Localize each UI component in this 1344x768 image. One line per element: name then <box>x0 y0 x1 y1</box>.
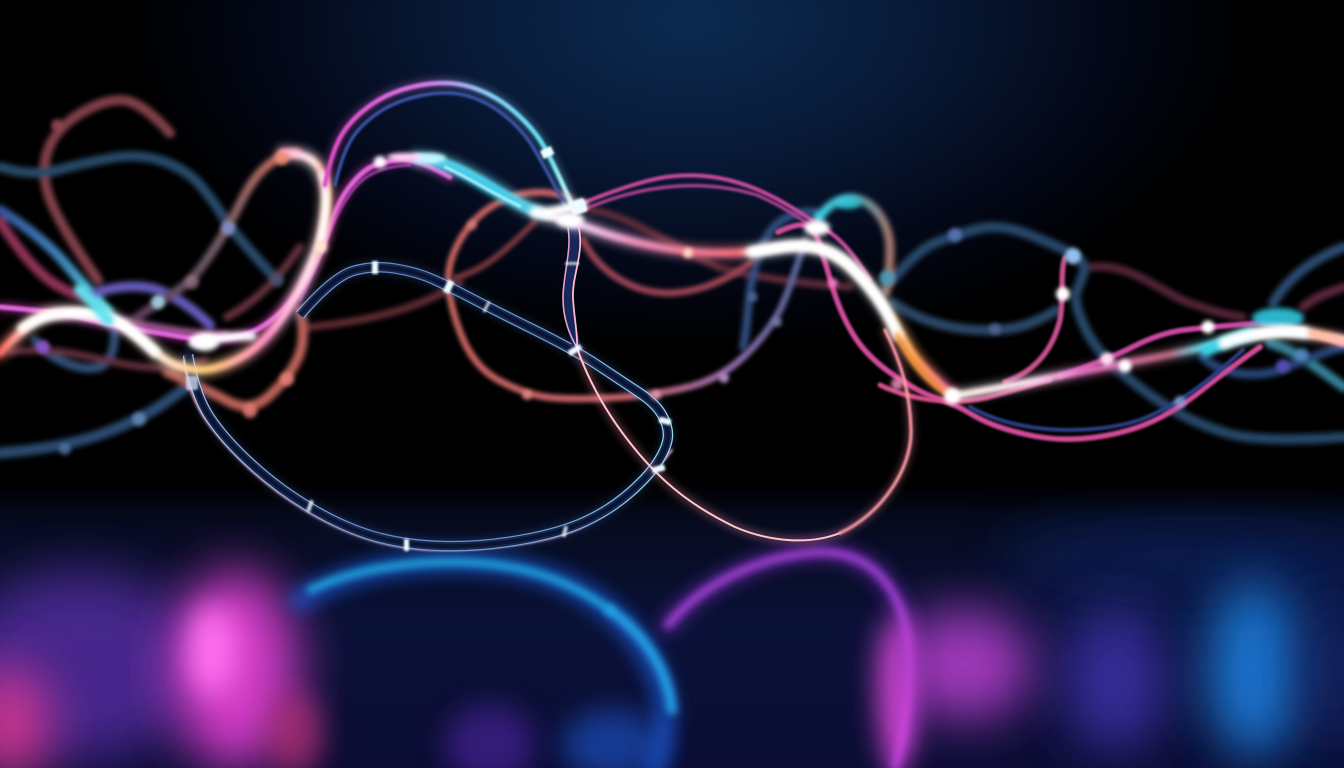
dot: coral bottom two <box>243 404 257 418</box>
dot: left blue <box>221 221 235 235</box>
strand: main blue-white tube loop <box>184 267 672 550</box>
reflection: magenta column <box>173 570 297 768</box>
glow: junction lower <box>556 212 584 228</box>
strand: dim red right edge <box>1303 287 1344 307</box>
strand: hot left wave <box>0 153 327 370</box>
core: hot left wave <box>0 153 327 370</box>
core: central wave <box>417 158 953 395</box>
reflection: pink column right of arc <box>879 617 915 768</box>
strand: navy wave top left <box>0 156 277 280</box>
strand: dim red mid <box>310 282 460 327</box>
glow: right wave <box>953 333 1344 396</box>
core: thin pink loop right <box>840 330 911 533</box>
dot: coral bottom one <box>280 372 294 386</box>
dot: magenta one <box>828 278 838 288</box>
bead: arc right <box>540 146 555 159</box>
dot: central loop two <box>651 390 661 400</box>
dot: right rise top <box>1065 248 1081 264</box>
dot: far right blue <box>1295 348 1309 362</box>
strand: dim red behind wave <box>590 210 850 287</box>
strand: left pink horizontal <box>0 160 450 339</box>
bead: crossing <box>567 344 583 356</box>
bead: right tip <box>658 417 672 425</box>
strand: magenta under right wave <box>880 380 1050 401</box>
bead: tube lower left <box>186 376 198 390</box>
strand: navy right arc <box>890 227 1344 439</box>
bead: bottom two <box>404 539 409 551</box>
soft dots along strands <box>36 119 1309 455</box>
strand: blue under magenta <box>970 350 1243 430</box>
glow: left tube node <box>191 333 219 351</box>
strand: coral central loop <box>448 192 805 399</box>
inner: pink arc second line <box>583 186 810 225</box>
dot: blue lower-left <box>132 412 146 426</box>
reflection: violet arc <box>668 552 909 768</box>
reflection: magenta hot spot <box>188 605 236 695</box>
edge: thin tube left <box>563 228 577 348</box>
strand: long central wave <box>417 158 953 395</box>
dot: floor crossing <box>944 388 960 404</box>
reflection: purple inner glow <box>445 705 535 768</box>
strand: blue to cyan far left <box>0 210 110 313</box>
dot: blue lower-left two <box>59 443 71 455</box>
strand: top arc magenta to cyan <box>325 83 572 207</box>
dot: navy arc <box>948 228 962 242</box>
highlight: cyan left edge <box>1206 333 1250 351</box>
strand: navy far right <box>1273 247 1344 303</box>
dot: left tangle <box>151 295 165 309</box>
dot: central loop left <box>467 220 477 230</box>
strand: violet upper tangle <box>90 286 210 325</box>
strand: blue tube lower left <box>0 387 187 453</box>
highlight: vertical white on rise <box>321 175 326 240</box>
highlight: white segment on wave <box>752 246 897 335</box>
reflection: far right navy <box>1299 590 1344 750</box>
dot: coral top left <box>51 119 63 131</box>
reflection: left violet haze <box>0 570 200 760</box>
glow: ridge highlight <box>804 220 830 236</box>
highlight: orange descent <box>897 335 945 392</box>
strand: pink arc right of junction <box>583 175 870 280</box>
dot: wave <box>683 248 693 258</box>
glow: thin pink loop <box>577 330 911 540</box>
glow: cyan patch <box>1252 308 1304 328</box>
dot: navy lower <box>989 323 1001 335</box>
dot: navy junction <box>270 273 284 287</box>
floor reflections: blurred colour pools <box>0 515 1344 768</box>
dot: central loop violet <box>719 373 729 383</box>
strand: dim red lower left <box>10 350 205 368</box>
dot: arc start <box>374 156 386 168</box>
glow: tube <box>188 267 668 546</box>
highlight: cyan ribbon dark center <box>445 167 520 206</box>
strand: dim coral inside loop <box>455 222 535 278</box>
reflection: cyan right arc <box>610 610 672 710</box>
bead: lower right <box>651 464 666 473</box>
reflection: blue inner glow <box>562 710 662 768</box>
body: tube centre shade <box>188 267 668 546</box>
reflection: blue column <box>1207 582 1303 758</box>
highlight: cyan ribbon <box>440 163 540 212</box>
bead: bottom left <box>306 500 314 512</box>
dot: central loop bottom <box>522 390 532 400</box>
core: top arc <box>325 83 572 205</box>
strand: maroon far left <box>0 222 95 300</box>
highlight: far left white stretch <box>22 313 155 352</box>
reflection: far left pink <box>0 667 50 768</box>
inner: top arc blue line <box>335 93 566 207</box>
reflection: blue arc halo <box>300 562 665 768</box>
strand: pink rise to node <box>1005 258 1065 382</box>
junction glows <box>191 153 861 351</box>
highlight: white ribbon <box>1224 331 1305 343</box>
strand: blue under far right <box>1203 347 1344 374</box>
reflection: violet arc halo <box>668 552 909 768</box>
highlight: cyan crossing <box>80 290 108 320</box>
bead: tube mid <box>443 279 455 294</box>
dot: blue loop <box>748 292 758 302</box>
highlight: warm tail <box>1312 333 1344 341</box>
strand: coral lower left loop <box>167 310 303 406</box>
dot: navy arc teal <box>879 270 895 286</box>
glow: upper cyan <box>414 153 446 163</box>
strands: blurred background threads <box>0 100 1344 453</box>
strand: coral loop top left <box>44 100 170 280</box>
reflection: magenta haze right <box>897 610 1033 720</box>
dot: white rise <box>315 241 327 253</box>
strand: left grey to coral rise <box>133 153 296 320</box>
bead: bottom <box>562 526 568 537</box>
core: right wave <box>953 333 1344 396</box>
dot: far right <box>1174 396 1186 408</box>
strand: lower-left pink line <box>300 165 410 300</box>
glow: teal hook top <box>835 197 861 209</box>
bead markers along tubes <box>186 146 672 551</box>
strand: teal far right <box>1270 343 1344 387</box>
dot: coral top <box>275 151 289 165</box>
glow: central wave <box>417 158 953 395</box>
reflection: right side blue sheen <box>1000 515 1344 605</box>
body: tube dark interior <box>188 267 668 546</box>
bead: tube mid two <box>482 301 491 313</box>
strand: blue left tangle <box>35 315 114 368</box>
body: thin tube dark fill <box>568 228 577 348</box>
strand: magenta upper right wave <box>1060 323 1344 376</box>
strand: teal hook <box>815 198 890 292</box>
glow: upper pink white <box>387 153 423 161</box>
dot: right wave two <box>1118 360 1132 372</box>
reflection: blue arc line <box>310 562 610 610</box>
dot: dim rise <box>185 275 199 289</box>
dot: purple tangle <box>36 340 50 354</box>
reflection: violet blur <box>1063 608 1167 752</box>
glow: top arc <box>325 83 572 205</box>
dot: right wave <box>1202 320 1214 334</box>
bead: thin tube <box>565 262 579 265</box>
bead: tube top <box>372 261 378 274</box>
strand: dim red far right <box>1093 266 1243 317</box>
edge: tube pink outer lower <box>184 360 672 550</box>
core: left pink horizontal <box>0 160 450 339</box>
core: thin pink loop left <box>577 348 840 540</box>
glow: hot left wave <box>0 153 327 370</box>
strand: right wave <box>953 308 1344 396</box>
highlight: white node at crossing <box>193 336 252 342</box>
dot: right wave three <box>1100 352 1114 366</box>
core: pink arc <box>583 175 870 280</box>
strand: dim red rising <box>227 247 300 317</box>
glow: central junction <box>535 205 582 213</box>
strand: coral lower arc <box>583 240 752 293</box>
horizon fade <box>0 475 1344 515</box>
floor: reflective surface <box>0 488 1344 768</box>
dot: grey loop <box>772 317 782 327</box>
strand: navy right lower arc <box>893 303 1057 330</box>
bead: junction <box>568 198 588 216</box>
strand: thin pink loop right <box>563 228 911 540</box>
strand: dusty horizontal <box>125 322 225 335</box>
dot: right rise <box>1056 287 1070 301</box>
strand: magenta descending to right <box>778 225 1260 439</box>
glow: left pink horizontal <box>0 160 450 339</box>
background: dark blue top glow <box>0 0 1344 495</box>
edge: thin tube right <box>573 228 580 348</box>
reflection: lower pink smear <box>267 693 323 768</box>
dot: far right purple <box>1276 359 1290 373</box>
strand: blue central loop <box>743 212 815 347</box>
edge: tube outer lines <box>188 267 668 546</box>
dot: magenta two <box>891 378 903 390</box>
